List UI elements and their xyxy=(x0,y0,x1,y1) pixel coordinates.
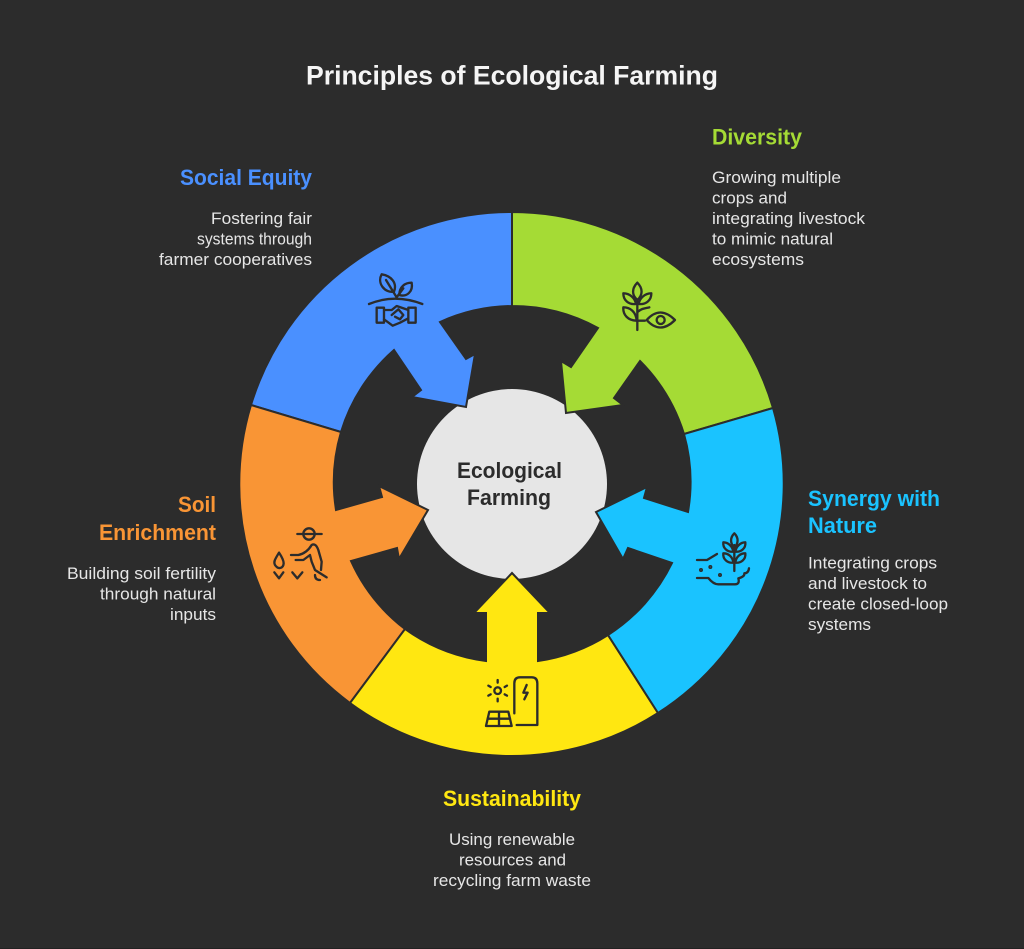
panel: sustainability text xyxy=(433,786,591,890)
segment: social equity arrow xyxy=(251,212,512,432)
panel: social equity text: systems through xyxy=(197,230,312,248)
panel: sustainability text: recycling farm waste xyxy=(433,872,591,890)
panel: synergy with nature text xyxy=(808,486,948,634)
panel: diversity text: crops and xyxy=(712,190,787,208)
center circle: Farming xyxy=(467,485,551,510)
panel: diversity text: to mimic natural xyxy=(712,230,833,248)
panel: soil enrichment text xyxy=(67,492,217,624)
icon: farmer planting xyxy=(274,528,327,580)
panel: social equity text xyxy=(159,165,313,269)
segment: synergy with nature arrow xyxy=(596,408,784,713)
panel: sustainability text: Sustainability xyxy=(443,786,582,811)
panel: synergy with nature text: Integrating crops xyxy=(808,554,937,572)
panel: sustainability text: resources and xyxy=(459,852,566,870)
panel: social equity text: Social Equity xyxy=(180,165,313,190)
panel: diversity text: integrating livestock xyxy=(712,210,866,228)
panel: soil enrichment text: Soil xyxy=(178,492,216,517)
center circle: Ecological xyxy=(457,458,562,483)
panel: soil enrichment text: through natural xyxy=(100,586,216,604)
panel: social equity text: farmer cooperatives xyxy=(159,251,312,269)
segment: sustainability arrow xyxy=(350,573,658,756)
panel: synergy with nature text: systems xyxy=(808,616,871,634)
panel: soil enrichment text: Building soil fertility xyxy=(67,565,217,583)
panel: diversity text: Diversity xyxy=(712,124,803,150)
icon: plant and handshake xyxy=(369,274,422,326)
segment: soil enrichment arrow xyxy=(239,405,428,703)
panel: sustainability text: Using renewable xyxy=(449,831,575,849)
panel: soil enrichment text: Enrichment xyxy=(99,520,217,545)
segment: diversity arrow xyxy=(512,212,773,434)
icon: wheat and hand xyxy=(697,533,749,584)
panel: diversity text: Growing multiple xyxy=(712,169,841,187)
icon: sun, solar panel and battery xyxy=(486,677,537,726)
panel: diversity text xyxy=(712,124,866,269)
title: Principles of Ecological Farming xyxy=(306,60,718,90)
panel: synergy with nature text: and livestock to xyxy=(808,575,927,593)
panel: diversity text: ecosystems xyxy=(712,251,804,269)
panel: synergy with nature text: create closed-loop xyxy=(808,596,948,614)
panel: social equity text: Fostering fair xyxy=(211,210,313,228)
panel: synergy with nature text: Nature xyxy=(808,513,877,538)
center circle xyxy=(417,389,607,579)
panel: synergy with nature text: Synergy with xyxy=(808,486,940,511)
panel: soil enrichment text: inputs xyxy=(170,606,216,624)
icon: wheat and eye xyxy=(623,283,675,330)
